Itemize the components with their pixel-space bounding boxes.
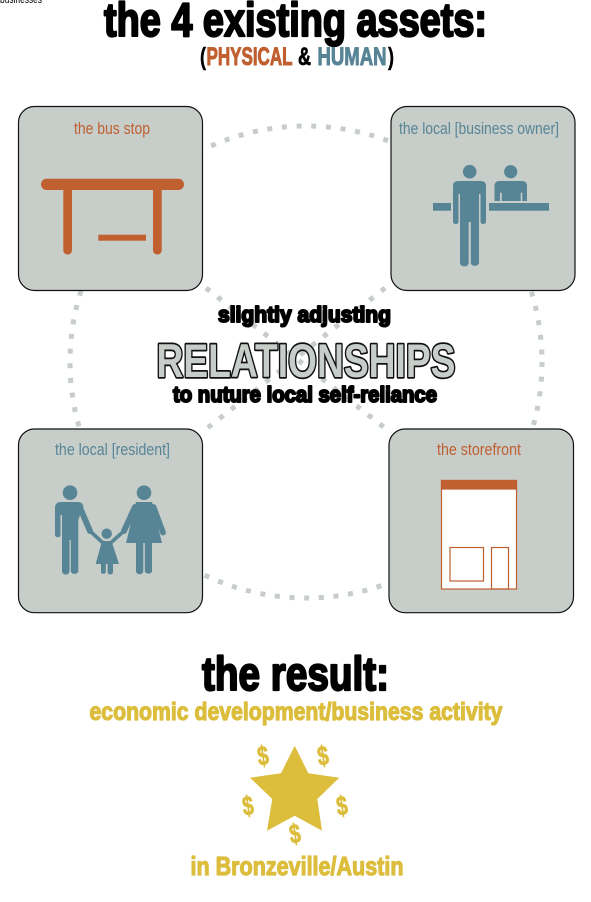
label: the bus stop: the bus stop [74, 119, 150, 138]
panel: the local resident [18, 429, 202, 613]
heading: to nuture local self-reliance: to nuture local self-reliance [173, 382, 437, 407]
icon: bench [41, 179, 184, 254]
icon: business owner at counter [433, 165, 549, 266]
icon: star with dollar signs: $ [240, 790, 256, 822]
subtitle: HUMAN [318, 43, 386, 71]
panel: the storefront [389, 429, 574, 613]
heading: slightly adjusting: slightly adjusting [218, 302, 391, 327]
label: the storefront: the storefront [437, 440, 521, 459]
subtitle: ( [200, 43, 206, 71]
panel: the bus stop [18, 106, 202, 290]
icon: storefront [442, 480, 516, 589]
label: the local resident: the local [resident] [55, 440, 170, 459]
icon: family [55, 485, 163, 575]
icon: star with dollar signs [240, 740, 350, 850]
subtitle: & [298, 43, 311, 71]
subtitle [200, 43, 394, 71]
icon: star with dollar signs: $ [334, 790, 350, 822]
dotted relationship network [70, 126, 542, 598]
panel: the local business owner [391, 106, 575, 290]
icon: star with dollar signs: $ [255, 740, 271, 772]
subtitle: ) [388, 43, 394, 71]
location text: in Bronzeville/Austin [190, 851, 404, 881]
icon: star with dollar signs: $ [315, 740, 331, 772]
heading: the result: the result: [202, 647, 389, 700]
subheading: economic development: economic development/business activity [90, 698, 503, 726]
label: the local business owner: the local [business owner] [399, 119, 559, 138]
heading: relationships: RELATIONSHIPS [156, 334, 456, 387]
icon: star with dollar signs: $ [287, 818, 303, 850]
subtitle: PHYSICAL [206, 43, 292, 71]
